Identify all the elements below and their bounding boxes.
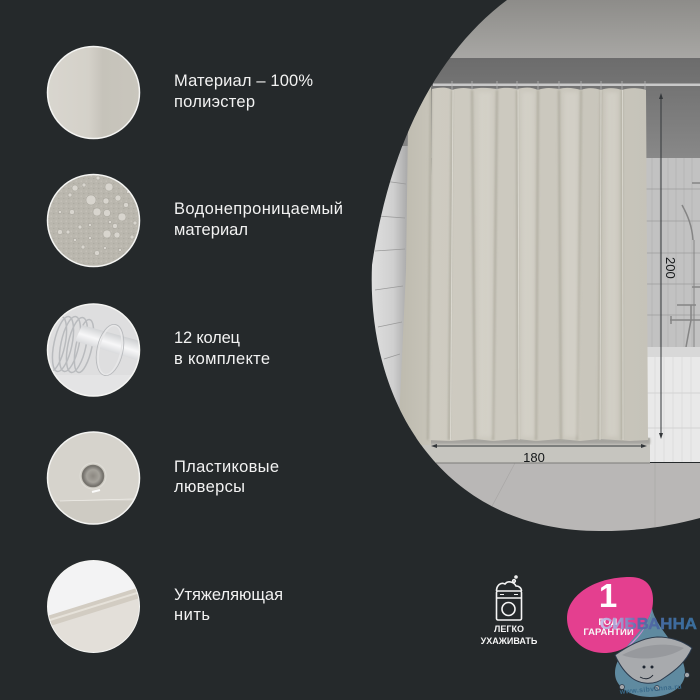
dimension: height 200 [659, 93, 678, 439]
left tile wall [372, 146, 410, 428]
text: thread [174, 586, 283, 624]
text: eyelets: Пластиковые [174, 458, 279, 476]
text: rings [174, 329, 270, 368]
text: eyelets [174, 458, 279, 496]
text: waterproof [174, 200, 343, 239]
shower rod with rings [433, 81, 700, 90]
text: eyelets: люверсы [174, 478, 245, 496]
text: material: полиэстер [174, 93, 255, 111]
logo name: СИБВАННА [600, 616, 697, 633]
text: waterproof: материал [174, 221, 248, 239]
text: material [174, 72, 313, 111]
swatch: eyelet [47, 432, 140, 525]
swatch: rod and rings [41, 303, 140, 396]
washing machine [496, 576, 522, 620]
text: rings: 12 колец [174, 329, 241, 347]
swatch: thread [47, 560, 140, 653]
feature: weighted thread [47, 560, 283, 653]
floor [436, 463, 700, 531]
shower fixtures [670, 183, 700, 348]
text: rings: в комплекте [174, 350, 270, 368]
text: warranty: ГАРАНТИИ [583, 627, 634, 638]
number 1: 1 [599, 577, 617, 614]
dimension: height 200: 200 [663, 257, 678, 279]
curtain [428, 88, 648, 441]
bathtub front [646, 347, 700, 462]
drop [615, 608, 685, 697]
feature: material polyester [47, 46, 313, 139]
text: waterproof: Водонепроницаемый [174, 200, 343, 218]
swatch: fabric [47, 46, 140, 139]
ceiling [450, 0, 700, 58]
curtain fold shadows [428, 90, 622, 440]
text: warranty: ГОД [598, 617, 618, 628]
bathtub mascot [615, 637, 692, 690]
text: thread: Утяжеляющая [174, 586, 283, 604]
feature: rings [41, 303, 270, 396]
wall strip under curtain [395, 438, 650, 463]
text: thread: нить [174, 606, 210, 624]
text: material: Материал – 100% [174, 72, 313, 90]
back curtain panel [400, 86, 432, 445]
text: easy care: ЛЕГКО [494, 624, 524, 634]
right tile wall [646, 158, 700, 348]
drop overlap on badge [624, 610, 652, 650]
photo: bathroom with shower curtain [360, 0, 700, 543]
text: easy care: УХАЖИВАТЬ [481, 636, 538, 646]
swatch: water drops [47, 174, 140, 267]
upper wall [398, 58, 700, 158]
badge: 1 year warranty [567, 577, 653, 653]
curtain fold highlights [450, 90, 623, 440]
feature: eyelets [47, 432, 279, 525]
logo url: www.sibvanna.ru [619, 684, 682, 696]
feature: waterproof [47, 174, 343, 267]
dimension: width 180 [431, 444, 647, 465]
watermark logo: Sibvanna [600, 608, 697, 697]
dimension: width 180: 180 [523, 450, 545, 465]
icon: washing machine, easy care [481, 576, 538, 646]
bright curtain panels [526, 94, 616, 436]
